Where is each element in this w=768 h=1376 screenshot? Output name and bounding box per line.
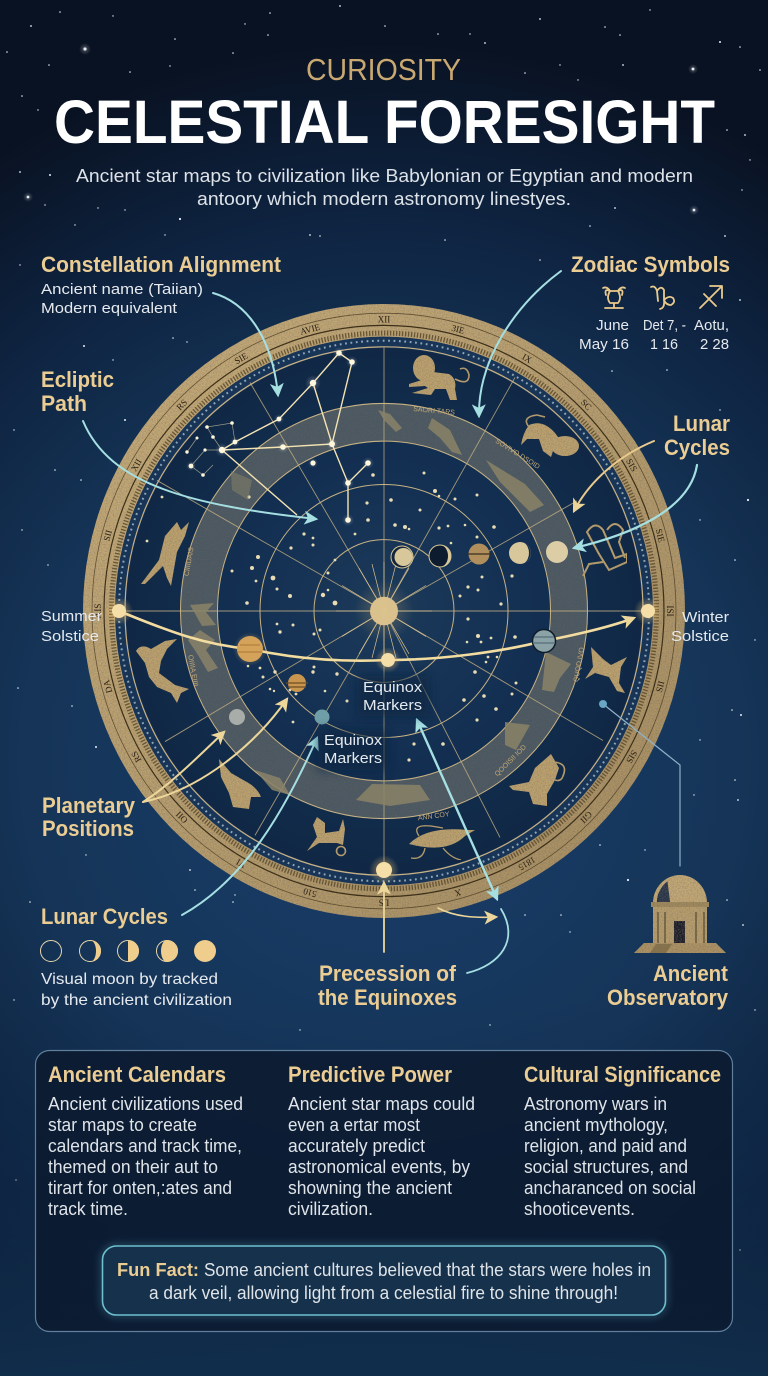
column: cultural significance: social structures, and xyxy=(524,1157,688,1177)
callout: fun fact: Some ancient cultures believed that the stars were holes in xyxy=(204,1260,651,1280)
band figures xyxy=(188,410,571,806)
eyebrow: Curiosity: CURIOSITY xyxy=(306,52,461,87)
moon phase row xyxy=(40,940,216,962)
ring labels xyxy=(93,314,675,908)
column: predictive power: astronomical events, by xyxy=(288,1157,470,1177)
planet: orange large xyxy=(233,632,267,666)
label: equinox markers lower: Equinox xyxy=(324,732,383,749)
column: cultural significance: Astronomy wars in xyxy=(524,1094,667,1114)
figure: right lion: SOVIVO DSOID xyxy=(494,438,541,471)
arrow: planetary two xyxy=(143,699,287,802)
ring labels: VI xyxy=(234,857,248,870)
glyph: libra xyxy=(603,287,625,308)
column: ancient calendars: themed on their aut to xyxy=(48,1157,218,1177)
central sun xyxy=(336,562,432,660)
column: predictive power: showning the ancient xyxy=(288,1178,452,1198)
figure: left hound: OIIIIA EIIII xyxy=(186,654,199,687)
heading: Lunar Cycles xyxy=(41,904,168,929)
label: ecliptic path: Ecliptic xyxy=(41,367,114,392)
arrow: lunar teal xyxy=(574,465,697,548)
faint constellation lines xyxy=(187,423,235,475)
arrow: precession vertical xyxy=(383,883,385,952)
planet: blue banded xyxy=(532,630,556,652)
ring labels: RS xyxy=(174,397,189,412)
label: equinox markers lower: Markers xyxy=(324,750,382,767)
arrow: small gold xyxy=(438,908,496,917)
ring labels: X xyxy=(453,887,462,899)
figure: dancer xyxy=(141,522,196,586)
title: CELESTIAL FORESIGHT xyxy=(54,88,715,156)
label: equinox markers upper: Markers xyxy=(363,697,422,714)
callout: fun fact: Fun Fact: xyxy=(117,1260,199,1280)
constellation stars xyxy=(185,347,374,526)
column: cultural significance: ancient mythology, xyxy=(524,1115,668,1135)
label: constellation alignment: Constellation Alignment xyxy=(41,252,282,277)
icon: zodiac glyphs xyxy=(603,286,722,309)
zodiac dates: Det 7, - xyxy=(643,317,686,334)
column: predictive power xyxy=(288,1062,475,1219)
arrow: planetary one xyxy=(143,732,224,802)
zodiac dates xyxy=(579,317,729,353)
zodiac dates: Aotu, xyxy=(694,317,729,334)
lunar phases on wheel xyxy=(391,541,568,568)
icon: ancient observatory xyxy=(634,875,726,953)
label: winter solstice xyxy=(671,609,729,645)
star field disc xyxy=(126,348,642,874)
star wheel xyxy=(83,304,685,918)
label: summer solstice xyxy=(41,608,102,645)
arrow: equinox double xyxy=(417,720,497,899)
figure: right lion xyxy=(494,415,579,471)
figure: top lion: SAORI TARS xyxy=(413,406,455,417)
ring labels: 510 xyxy=(302,886,318,899)
inner star dots xyxy=(146,472,518,762)
label: ancient observatory: Ancient xyxy=(653,961,729,986)
column: cultural significance: Cultural Significance xyxy=(524,1062,721,1087)
planets xyxy=(229,630,556,725)
arrow: ecliptic path xyxy=(83,421,316,519)
ring labels: XII xyxy=(378,314,390,324)
callout: fun fact xyxy=(102,1246,666,1315)
ring labels: ISI xyxy=(665,605,675,617)
label: equinox markers lower xyxy=(318,730,388,770)
zodiac dates: 1 16 xyxy=(650,336,678,353)
band and inner rings xyxy=(180,403,588,819)
figure: crab glyph xyxy=(583,524,627,576)
ring labels: SC xyxy=(579,397,594,412)
ring labels: SII xyxy=(102,529,114,542)
ring labels: DA xyxy=(101,678,114,694)
label: lunar cycles right: Lunar xyxy=(673,411,730,436)
planet: ringed orange xyxy=(286,674,308,692)
ring labels: SIE xyxy=(654,528,667,544)
label: lunar cycles right: Cycles xyxy=(664,435,730,460)
label: planetary positions: Positions xyxy=(42,816,134,841)
label: winter solstice: Winter xyxy=(682,609,729,626)
label: constellation alignment: Modern equivalent xyxy=(41,300,178,317)
label: summer solstice: Summer xyxy=(41,608,102,625)
ring labels: XII xyxy=(129,457,144,473)
legend: lunar cycles xyxy=(40,904,232,1009)
label: lunar cycles right xyxy=(664,411,730,460)
column: ancient calendars: star maps to create xyxy=(48,1115,197,1135)
subtitle: antoory which modern astronomy linestyes. xyxy=(197,188,571,209)
observatory marker dot xyxy=(599,700,607,708)
figure: top lion xyxy=(409,355,469,417)
figure: ram: QOOISII IOD xyxy=(494,744,528,778)
moon: banded xyxy=(467,544,491,564)
figure: ram xyxy=(494,744,564,806)
ring labels: 3IE xyxy=(450,323,466,336)
figure: goat: QUQD IVO xyxy=(573,646,586,683)
column: predictive power: civilization. xyxy=(288,1199,373,1219)
label: constellation alignment xyxy=(41,252,282,317)
radial lines xyxy=(125,347,643,875)
label: constellation alignment: Ancient name (Taiian) xyxy=(41,281,203,298)
label: summer solstice: Solstice xyxy=(41,628,99,645)
label: precession of the equinoxes xyxy=(318,961,457,1010)
ring labels: AIS xyxy=(93,604,103,618)
caption: by the ancient civilization xyxy=(41,992,232,1009)
moon: gibbous xyxy=(391,546,413,568)
callout: fun fact: a dark veil, allowing light from a celestial fire to shine through! xyxy=(149,1283,618,1303)
label: ancient observatory xyxy=(607,961,729,1010)
label: ecliptic path xyxy=(41,367,114,416)
caption xyxy=(41,971,232,1009)
label: zodiac symbols: Zodiac Symbols xyxy=(571,252,730,277)
figure: left hound xyxy=(136,639,199,703)
column: cultural significance: shooticevents. xyxy=(524,1199,635,1219)
ring labels: SIE xyxy=(233,350,250,366)
ring labels: RS xyxy=(129,749,143,764)
zodiac dates: June xyxy=(596,317,629,334)
moon: crescent xyxy=(429,545,451,567)
arrow: precession arc xyxy=(467,909,508,973)
column: predictive power: Predictive Power xyxy=(288,1062,452,1087)
label: ecliptic path: Path xyxy=(41,391,87,416)
column: cultural significance: ancharanced on social xyxy=(524,1178,696,1198)
moon: full xyxy=(546,541,568,563)
figure: lower-left beast xyxy=(219,759,261,809)
column: predictive power: accurately predict xyxy=(288,1136,425,1156)
zodiac figures xyxy=(136,355,627,860)
ring labels: AVIE xyxy=(299,322,322,337)
ring labels: SIS xyxy=(624,749,639,765)
moon: half lit xyxy=(509,542,531,564)
subtitle xyxy=(76,165,693,209)
outer gold ring xyxy=(83,304,685,918)
label: equinox markers upper xyxy=(357,676,429,716)
panel: summary xyxy=(36,1050,732,1332)
label: planetary positions: Planetary xyxy=(42,793,136,818)
arrow: lunar gold xyxy=(574,441,654,511)
zodiac band xyxy=(180,403,588,819)
column: cultural significance: religion, and paid and xyxy=(524,1136,687,1156)
figure: dancer: CIIIIDAIS xyxy=(184,546,196,577)
label: planetary positions xyxy=(42,793,136,841)
constellation lines xyxy=(222,353,368,520)
column: predictive power: Ancient star maps could xyxy=(288,1094,475,1114)
arrow: constellation alignment xyxy=(213,293,278,395)
planet: teal xyxy=(314,710,330,724)
ecliptic path xyxy=(105,597,662,885)
ring labels: OII xyxy=(174,809,190,825)
glyph: sagittarius xyxy=(700,286,722,308)
column: ancient calendars: track time. xyxy=(48,1199,128,1219)
column: ancient calendars: Ancient Calendars xyxy=(48,1062,226,1087)
label: equinox markers upper: Equinox xyxy=(363,679,423,696)
label: ancient observatory: Observatory xyxy=(607,985,729,1010)
figure: scorpion xyxy=(409,811,475,860)
column: ancient calendars xyxy=(48,1062,243,1219)
label: precession of the equinoxes: Precession of xyxy=(319,961,457,986)
zodiac dates: 2 28 xyxy=(700,336,729,353)
column: ancient calendars: calendars and track time, xyxy=(48,1136,242,1156)
arrow: zodiac symbols xyxy=(479,271,561,416)
label: winter solstice: Solstice xyxy=(671,628,729,645)
figure: scorpion: ANN COY xyxy=(417,811,450,822)
ring labels: LS xyxy=(379,898,389,908)
subtitle: Ancient star maps to civilization like Babylonian or Egyptian and modern xyxy=(76,165,693,186)
ring labels: IIS xyxy=(654,680,666,693)
arrow: lunar cycles legend xyxy=(182,738,317,915)
header xyxy=(54,52,715,209)
figure: lower dog xyxy=(307,817,346,856)
callout arrows xyxy=(83,271,697,973)
zodiac dates: May 16 xyxy=(579,336,629,353)
label: zodiac symbols xyxy=(571,252,730,353)
column: cultural significance xyxy=(524,1062,721,1219)
column: predictive power: even a ertar most xyxy=(288,1115,420,1135)
label: precession of the equinoxes: the Equinoxes xyxy=(318,985,457,1010)
ring labels: IX xyxy=(520,352,534,365)
ring labels: SIS xyxy=(624,457,639,473)
ring labels: GII xyxy=(578,809,594,825)
column: ancient calendars: tirart for onten,:ates and xyxy=(48,1178,232,1198)
caption: Visual moon by tracked xyxy=(41,971,218,988)
leader: observatory xyxy=(603,704,680,866)
ring labels: 1815 xyxy=(516,855,537,873)
column: ancient calendars: Ancient civilizations used xyxy=(48,1094,243,1114)
glyph: capricorn xyxy=(651,286,674,309)
constellation alignment xyxy=(185,347,374,526)
planet: grey xyxy=(229,709,245,725)
figure: goat xyxy=(573,646,627,693)
